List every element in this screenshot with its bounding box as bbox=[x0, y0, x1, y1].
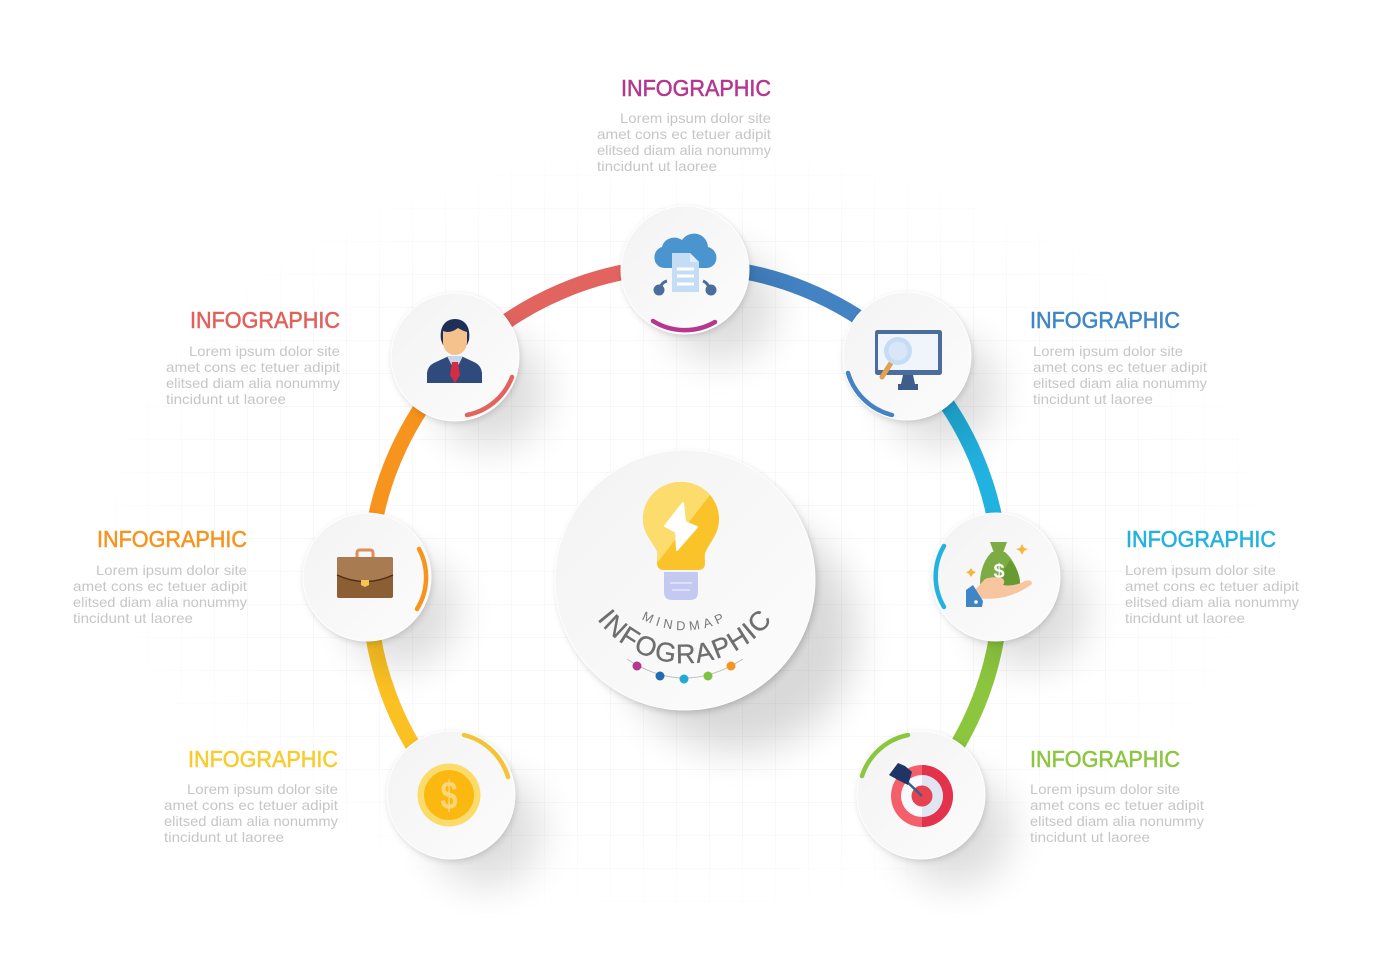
heading: INFOGRAPHIC bbox=[1030, 307, 1180, 333]
body: amet cons ec tetuer adipit bbox=[1125, 578, 1299, 594]
node: right money bag bbox=[932, 513, 1060, 642]
body bbox=[73, 562, 247, 626]
node: top-right monitor bbox=[843, 292, 971, 421]
body: tincidunt ut laoree bbox=[166, 391, 286, 407]
node: left briefcase bbox=[303, 513, 431, 642]
icon: light bulb bbox=[643, 482, 719, 600]
body bbox=[1030, 781, 1204, 845]
body: tincidunt ut laoree bbox=[1033, 391, 1153, 407]
accent arc bbox=[653, 321, 715, 330]
icon: businessman bbox=[427, 319, 482, 383]
body: elitsed diam alia nonummy bbox=[164, 813, 338, 829]
node: top cloud document bbox=[621, 206, 749, 335]
body bbox=[164, 781, 338, 845]
accent arc bbox=[417, 549, 426, 609]
heading: INFOGRAPHIC bbox=[1126, 526, 1276, 552]
body: Lorem ipsum dolor site bbox=[187, 781, 338, 797]
soft long shadows bbox=[346, 249, 1087, 886]
accent arc bbox=[464, 735, 508, 777]
accent arc bbox=[848, 373, 892, 415]
accent arc bbox=[467, 377, 512, 415]
curved label: MINDMAP: MINDMAP bbox=[642, 612, 722, 630]
body: amet cons ec tetuer adipit bbox=[1033, 359, 1207, 375]
icon: hand holding money bag: $ bbox=[993, 561, 1005, 583]
body: amet cons ec tetuer adipit bbox=[164, 797, 338, 813]
node: top-left person bbox=[391, 293, 519, 422]
decorative dot string bbox=[627, 659, 743, 684]
body: tincidunt ut laoree bbox=[73, 610, 193, 626]
icon: cloud document bbox=[654, 234, 716, 296]
body bbox=[597, 110, 771, 174]
body: elitsed diam alia nonummy bbox=[73, 594, 247, 610]
heading: INFOGRAPHIC bbox=[188, 746, 338, 772]
body: elitsed diam alia nonummy bbox=[1030, 813, 1204, 829]
heading: INFOGRAPHIC bbox=[1030, 746, 1180, 772]
heading: INFOGRAPHIC bbox=[97, 526, 247, 552]
body: tincidunt ut laoree bbox=[1125, 610, 1245, 626]
body: elitsed diam alia nonummy bbox=[166, 375, 340, 391]
node: bottom-left coin bbox=[387, 731, 515, 860]
body: tincidunt ut laoree bbox=[1030, 829, 1150, 845]
body: Lorem ipsum dolor site bbox=[1125, 562, 1276, 578]
curved label: INFOGRAPHIC: INFOGRAPHIC bbox=[598, 609, 770, 664]
text block: bottom-right bbox=[1030, 746, 1204, 845]
node: bottom-right target bbox=[857, 731, 985, 860]
body: amet cons ec tetuer adipit bbox=[597, 126, 771, 142]
body: amet cons ec tetuer adipit bbox=[73, 578, 247, 594]
body: elitsed diam alia nonummy bbox=[597, 142, 771, 158]
text block: top bbox=[597, 75, 771, 174]
text block: right bbox=[1125, 526, 1299, 626]
body: Lorem ipsum dolor site bbox=[1033, 343, 1183, 359]
body: Lorem ipsum dolor site bbox=[96, 562, 247, 578]
body bbox=[1033, 343, 1207, 407]
body: Lorem ipsum dolor site bbox=[189, 343, 340, 359]
body: amet cons ec tetuer adipit bbox=[166, 359, 340, 375]
text block: left bbox=[73, 526, 247, 626]
body: elitsed diam alia nonummy bbox=[1125, 594, 1299, 610]
heading: INFOGRAPHIC bbox=[190, 307, 340, 333]
body bbox=[1125, 562, 1299, 626]
body: Lorem ipsum dolor site bbox=[1030, 781, 1180, 797]
accent arc bbox=[862, 735, 908, 776]
ring: coloured arc segments bbox=[369, 266, 1001, 796]
body: amet cons ec tetuer adipit bbox=[1030, 797, 1204, 813]
body: tincidunt ut laoree bbox=[597, 158, 717, 174]
text block: top-left bbox=[166, 307, 340, 407]
icon: dollar coin: $ bbox=[440, 774, 458, 818]
icon: dart target bbox=[889, 763, 953, 827]
icon: briefcase bbox=[337, 550, 393, 598]
body: Lorem ipsum dolor site bbox=[620, 110, 771, 126]
body: elitsed diam alia nonummy bbox=[1033, 375, 1207, 391]
text block: top-right bbox=[1030, 307, 1207, 407]
text block: bottom-left bbox=[164, 746, 338, 845]
heading: INFOGRAPHIC bbox=[621, 75, 771, 101]
icon: monitor with magnifier bbox=[875, 330, 942, 390]
body: tincidunt ut laoree bbox=[164, 829, 284, 845]
body bbox=[166, 343, 340, 407]
accent arc bbox=[936, 546, 944, 607]
panel: centre hub bbox=[554, 450, 820, 716]
